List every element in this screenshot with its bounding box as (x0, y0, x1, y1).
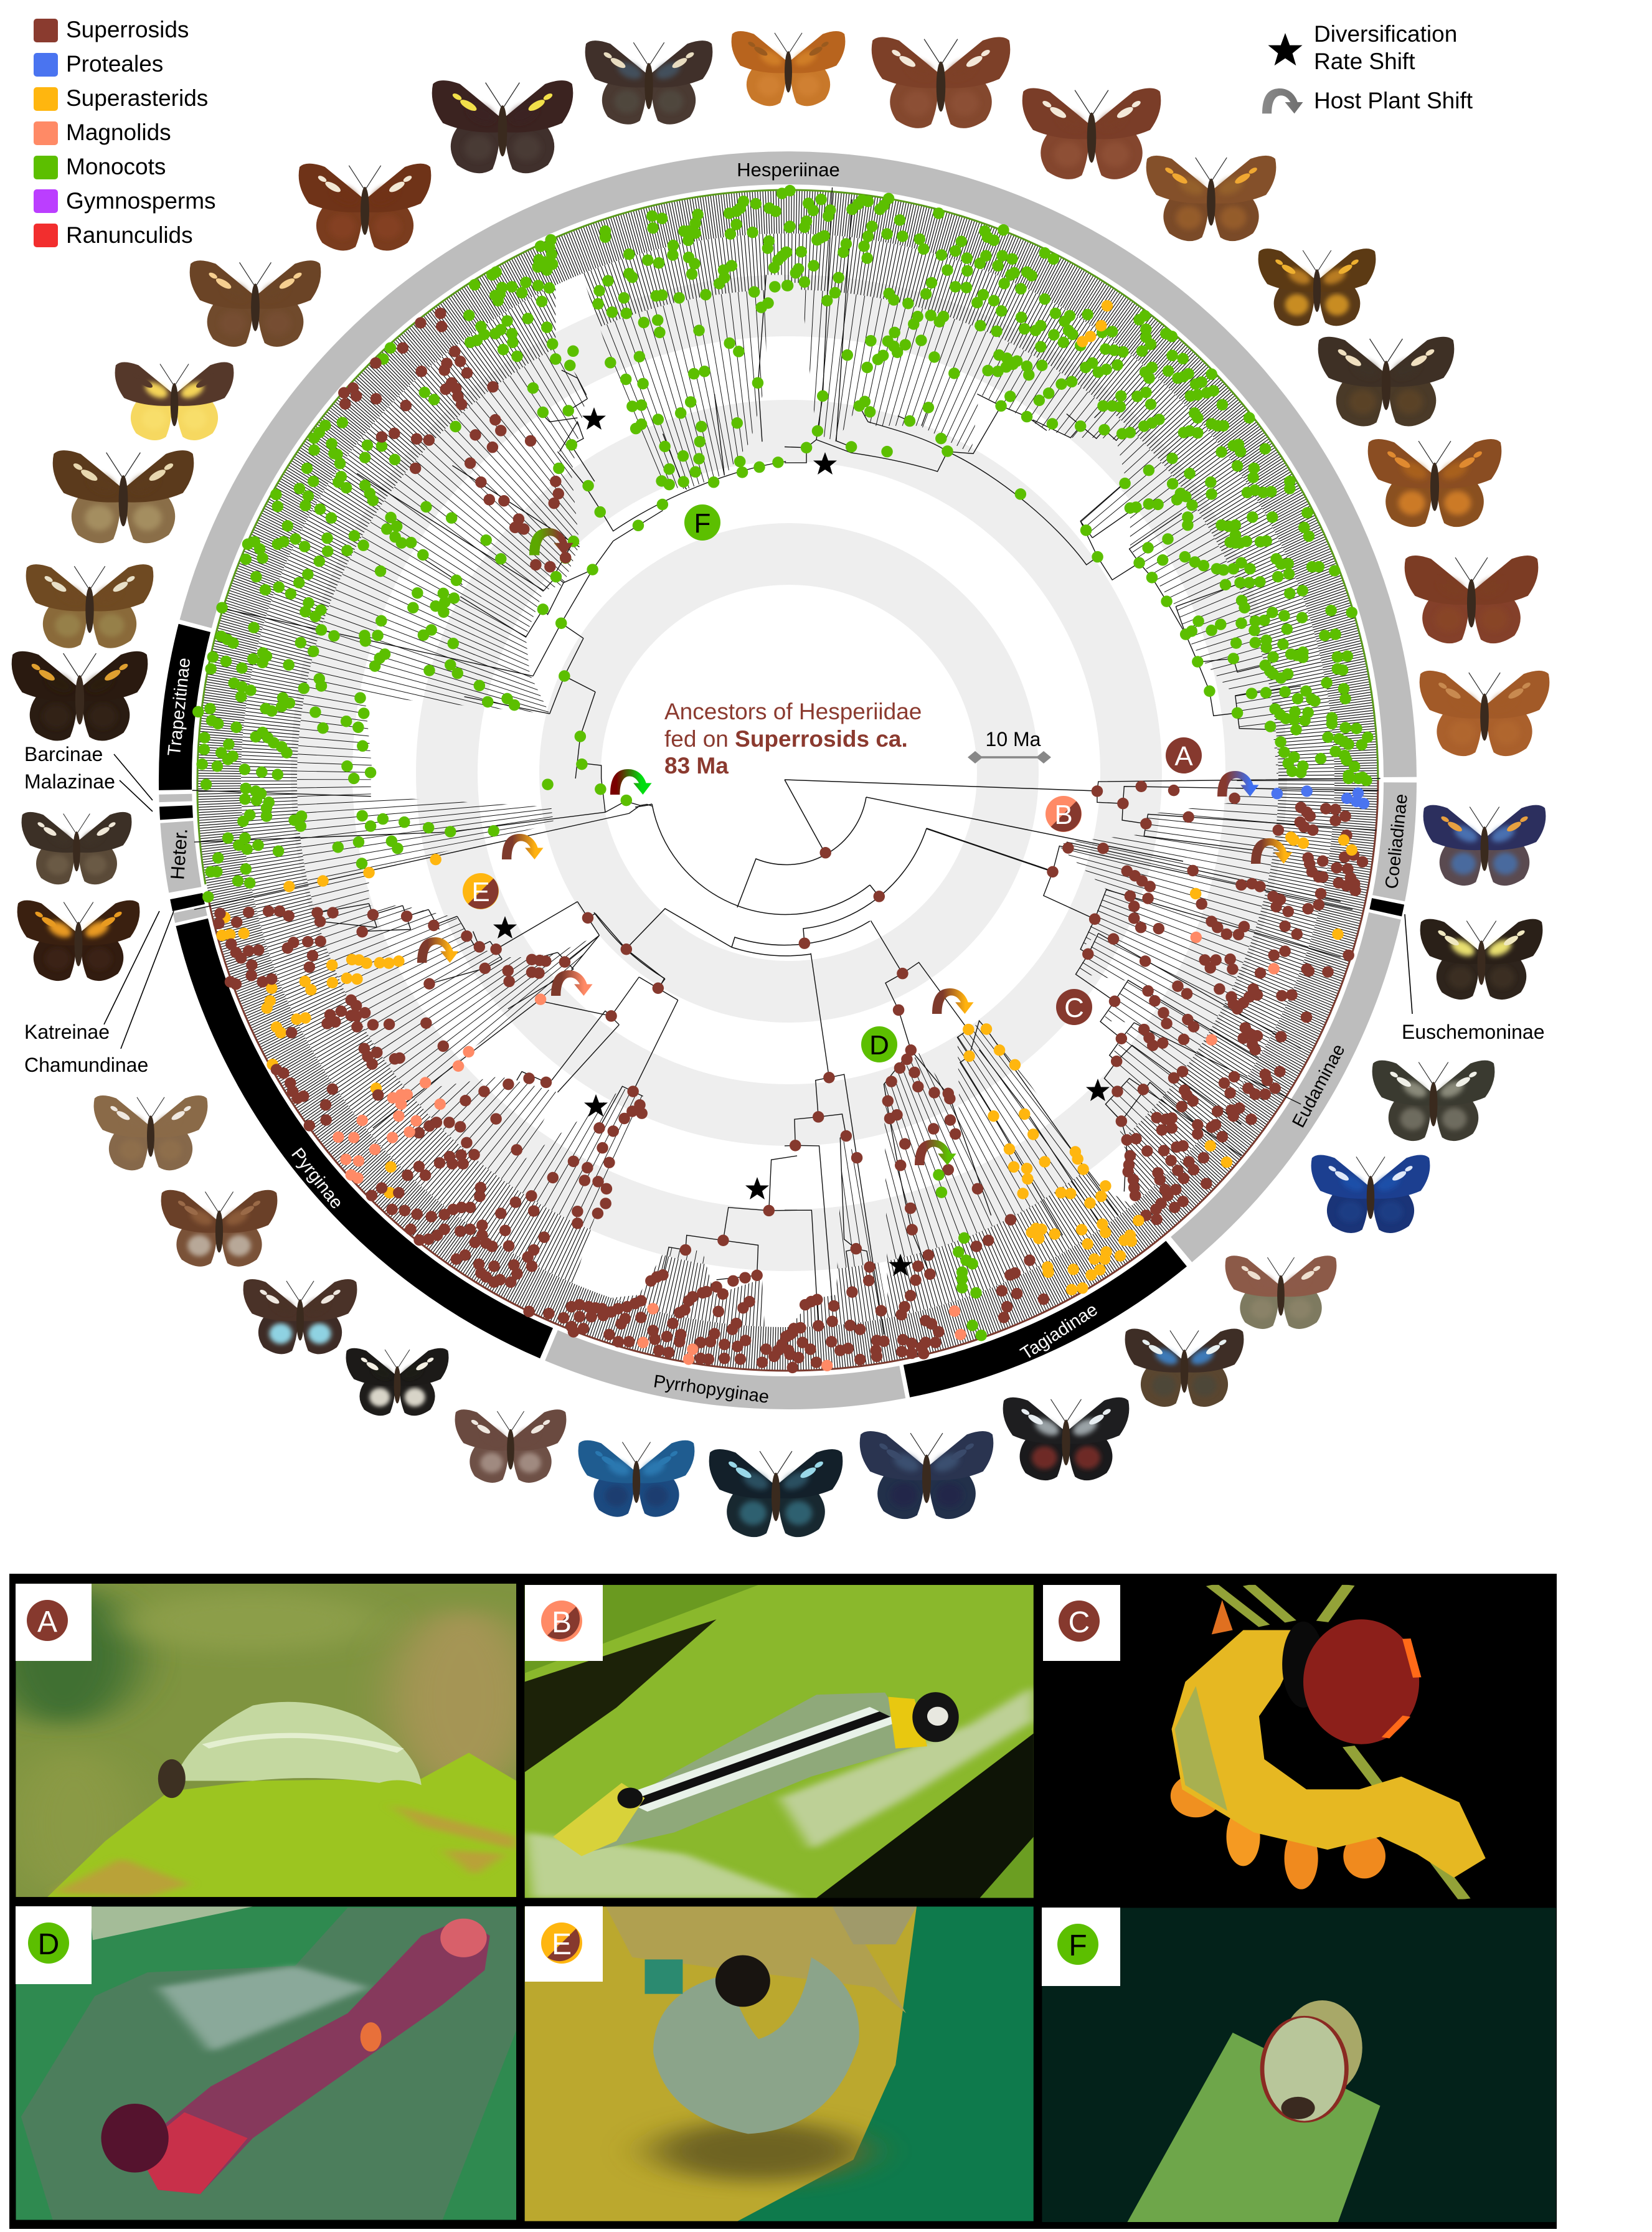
side labels with leader lines: Barcinae (24, 743, 103, 765)
scale bar 10 Ma: 10 Ma (986, 728, 1041, 750)
legend: host plant colours: Proteales (66, 51, 163, 77)
clade letter markers: A (1174, 741, 1193, 772)
central annotation: 83 Ma (664, 753, 729, 778)
side labels with leader lines: Katreinae (24, 1021, 110, 1043)
legend: diversification and host shift: Diversification (1314, 21, 1457, 47)
subfamily ring labels: Heter. (166, 828, 192, 881)
legend: diversification and host shift: Host Plant Shift (1314, 88, 1473, 113)
side labels with leader lines (24, 743, 1544, 1076)
central annotation: Superrosids ca. (735, 726, 908, 752)
clade letter markers (463, 504, 1202, 1062)
subfamily ring labels: Pyrrhopyginae (652, 1371, 770, 1407)
photo letter tags: C (1069, 1606, 1090, 1639)
node dots lower-left quadrant (206, 778, 794, 1363)
legend: host plant colours: Monocots (66, 154, 166, 179)
legend: diversification and host shift: Rate Shift (1314, 49, 1415, 74)
subfamily ring labels: Eudaminae (1288, 1041, 1349, 1131)
photo A: pale green caterpillar on leaf (0, 1584, 537, 1897)
subfamily ring (175, 168, 1400, 1393)
clade letter markers: D (869, 1030, 889, 1061)
scale bar 10 Ma (968, 728, 1051, 764)
photo letter tags: A (37, 1605, 57, 1639)
subfamily ring labels (164, 159, 1412, 1407)
photo letter tags: E (552, 1928, 572, 1961)
legend: host plant colours: Superasterids (66, 85, 208, 111)
legend: diversification and host shift (1262, 21, 1473, 113)
side labels with leader lines: Chamundinae (24, 1054, 148, 1076)
panel: caterpillar photo frame (9, 1574, 1557, 2229)
legend: host plant colours (34, 17, 216, 248)
subfamily ring labels: Trapezitinae (164, 657, 194, 757)
photo F: small caterpillar on grass tip (1042, 1908, 1556, 2222)
central annotation: fed on (664, 726, 735, 752)
phylogeny tip lines (219, 212, 1356, 1349)
diversification rate shift stars (493, 407, 1110, 1276)
tip rim colours (197, 190, 1378, 1371)
node dots upper-left quadrant (198, 191, 790, 775)
host plant shift arrows (417, 528, 1293, 1165)
photo B: striped caterpillar on grass blade (525, 1585, 1034, 1898)
side labels with leader lines: Malazinae (24, 770, 115, 793)
photo letter tags: B (552, 1606, 572, 1639)
clade letter markers: B (1054, 800, 1073, 830)
grey time bands (321, 305, 1257, 1241)
subfamily ring labels: Tagiadinae (1017, 1300, 1102, 1364)
photo letter tags (16, 1584, 1120, 1986)
photo letter tags: D (38, 1928, 59, 1961)
specimen butterflies around the ring (12, 31, 1549, 1537)
node dots upper-right quadrant (786, 199, 1367, 777)
legend: host plant colours: Superrosids (66, 17, 189, 42)
clade letter markers: F (694, 508, 710, 539)
legend: host plant colours: Magnolids (66, 120, 171, 145)
legend: host plant colours: Gymnosperms (66, 188, 216, 214)
tree backbone (192, 187, 1381, 1335)
subfamily ring labels: Coeliadinae (1382, 793, 1412, 890)
subfamily ring labels: Hesperiinae (737, 159, 840, 181)
photo C: yellow caterpillar on stem (1171, 1584, 1486, 1899)
clade letter markers: E (471, 877, 490, 907)
node dots lower-right quadrant (786, 778, 1366, 1368)
photos of caterpillars (0, 1584, 1556, 2222)
photo E: green caterpillar on yellow leaf (525, 1906, 1034, 2221)
photo letter tags: F (1069, 1929, 1087, 1962)
clade letter markers: C (1064, 993, 1084, 1023)
central annotation: Ancestors of Hesperiidae (664, 699, 922, 724)
legend: host plant colours: Ranunculids (66, 222, 193, 248)
subfamily ring labels: Pyrginae (287, 1145, 347, 1213)
side labels with leader lines: Euschemoninae (1402, 1021, 1544, 1043)
photo D: red caterpillar on dark leaf (16, 1906, 516, 2220)
